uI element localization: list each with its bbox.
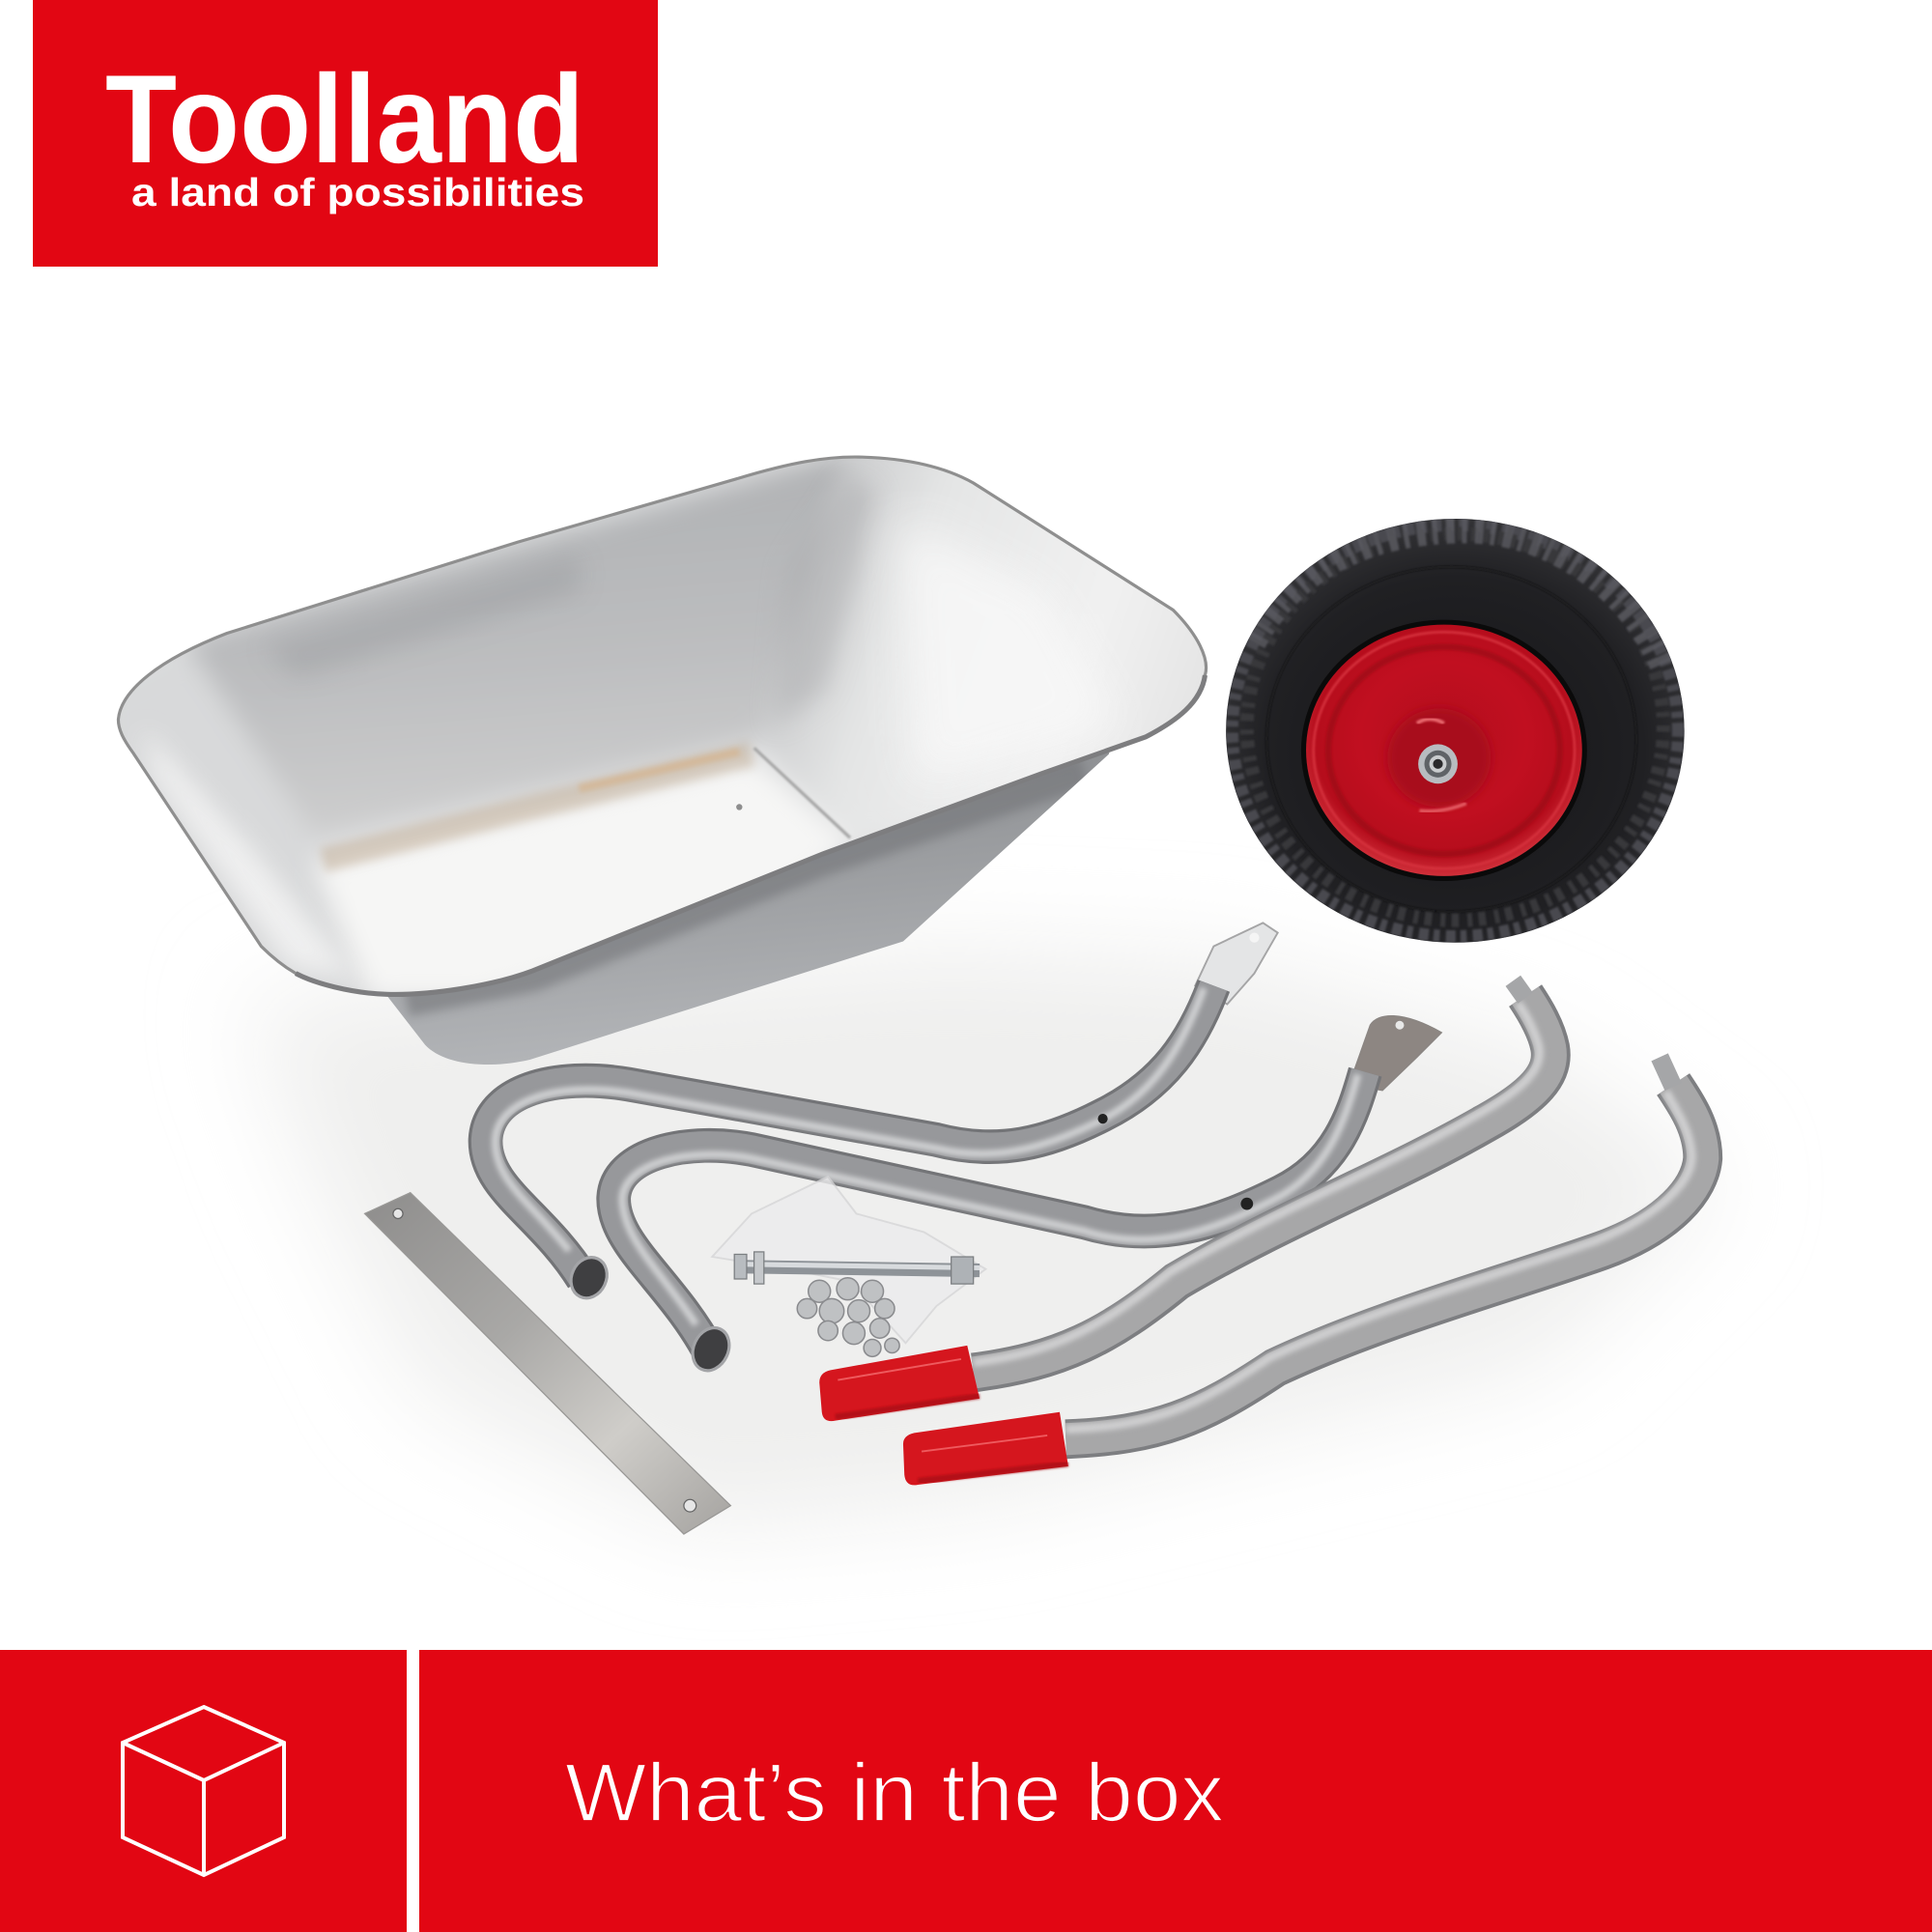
heading: What’s in the box — [565, 1747, 1224, 1839]
icon: box — [123, 1707, 284, 1875]
tray: galvanised wheelbarrow tub — [99, 443, 1233, 1084]
plastic bag — [712, 1177, 985, 1343]
tray outer body — [388, 752, 1109, 1065]
logo panel — [33, 0, 658, 267]
product photo: wheelbarrow parts — [99, 443, 1725, 1534]
axle bearing — [1418, 744, 1458, 783]
flat stay bar — [365, 1193, 730, 1534]
tray front rim band — [296, 675, 1205, 994]
red grip — [819, 1346, 980, 1421]
right handle — [903, 1057, 1703, 1485]
lower axle arm — [613, 1016, 1441, 1377]
tyre — [1226, 519, 1685, 943]
red rim — [1301, 620, 1587, 881]
drain hole — [736, 804, 742, 810]
logo tagline: a land of possibilities — [131, 170, 584, 214]
tray rim — [118, 457, 1207, 994]
floor shading — [246, 949, 1725, 1528]
axle bolt — [734, 1252, 980, 1284]
footer icon panel — [0, 1650, 407, 1932]
upper axle arm — [486, 923, 1278, 1304]
left handle — [819, 980, 1550, 1421]
logo wordmark: Toolland — [105, 48, 584, 189]
nuts and washers — [797, 1278, 899, 1356]
footer title panel — [419, 1650, 1932, 1932]
wheel — [1226, 519, 1685, 943]
tray interior — [99, 443, 1233, 1010]
fixings bag — [712, 1177, 985, 1356]
red grip — [903, 1412, 1068, 1485]
